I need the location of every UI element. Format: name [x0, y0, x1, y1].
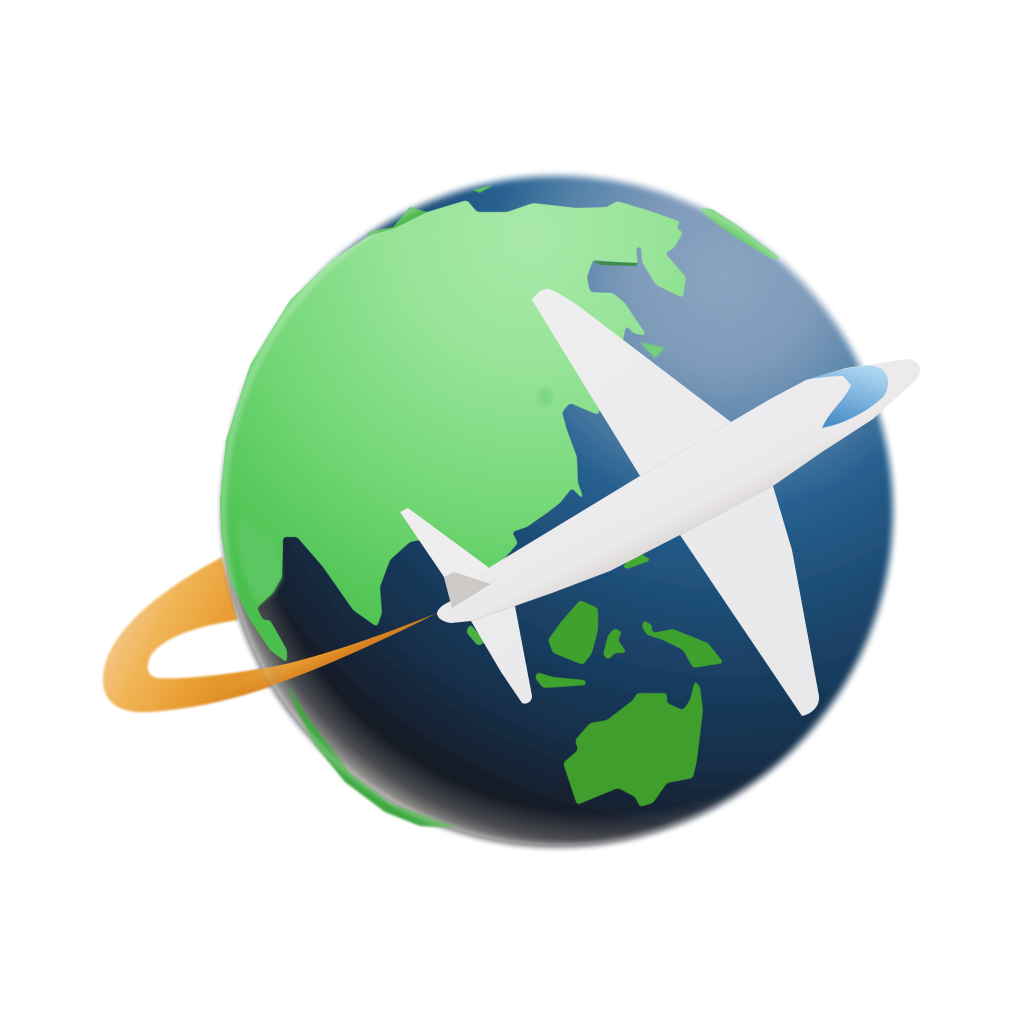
airplane: upper wing	[532, 289, 731, 476]
land detail: shadow in gulf	[593, 261, 638, 266]
continent: far east land edge	[698, 207, 783, 260]
illustration: globe with airplane	[102, 170, 920, 852]
airplane: lower wing	[680, 486, 819, 716]
land detail: dimple on the coast	[537, 388, 553, 406]
continent: top limb islands	[368, 185, 493, 240]
rim haze over globe edge	[223, 176, 893, 846]
airplane	[400, 289, 920, 716]
continent: Asia	[220, 200, 686, 663]
airplane: lower tail wing	[471, 606, 532, 704]
orange trail in front of globe	[199, 613, 437, 698]
land detail: Arabian peninsula shading	[238, 513, 282, 604]
continent: Australia	[563, 680, 703, 807]
globe sphere	[222, 175, 894, 847]
islands: Indonesia	[466, 552, 724, 688]
continent: Africa edge along the lower limb	[287, 683, 457, 828]
orange ring behind globe	[103, 557, 437, 712]
airplane: stabilizer	[444, 572, 491, 608]
airplane: cockpit window	[806, 366, 888, 428]
airplane: fuselage	[437, 359, 920, 623]
continent: southern island near wing	[640, 342, 665, 358]
airplane: tail fin	[400, 508, 495, 608]
